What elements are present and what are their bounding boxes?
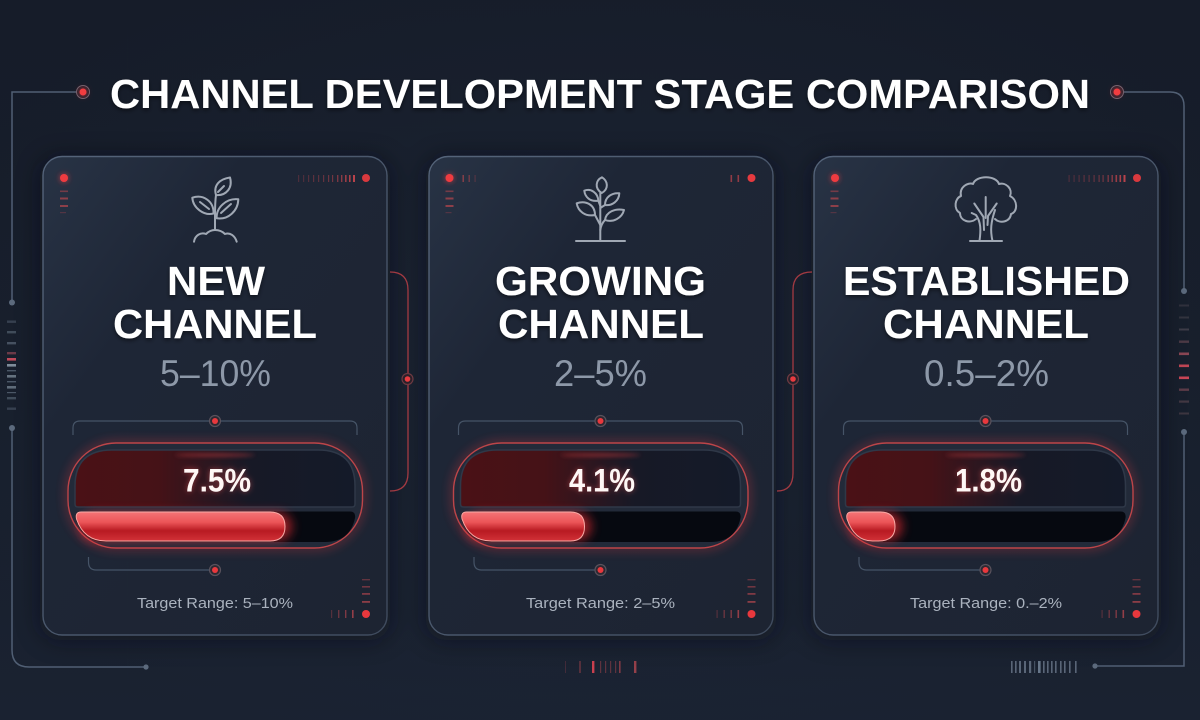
card shadows [40, 158, 1161, 640]
top bracket [844, 416, 1128, 435]
panel: established channel [814, 156, 1158, 635]
card body [429, 156, 773, 635]
title: CHANNEL DEVELOPMENT STAGE COMPARISON [110, 71, 1090, 117]
bottom bracket [859, 557, 991, 576]
heading: NEW [167, 258, 265, 304]
progress gauge [454, 443, 748, 548]
icon: tree [956, 177, 1016, 241]
top left status marker [830, 174, 839, 213]
bottom right status marker [331, 579, 370, 618]
bottom centre tick strip [565, 661, 636, 673]
fill [76, 512, 285, 541]
track [75, 512, 355, 542]
top left status marker [60, 174, 68, 213]
heading: CHANNEL [883, 301, 1089, 347]
panel: growing channel [429, 156, 773, 635]
heading [843, 258, 1130, 347]
connector: new to growing [390, 272, 413, 491]
icon: young plant [576, 177, 625, 241]
range value: 0.5–2% [924, 353, 1049, 394]
track [461, 512, 741, 542]
value: 7.5% [183, 462, 251, 498]
bottom right barcode strip [1011, 661, 1077, 673]
target range: Target Range: 2–5% [526, 595, 675, 612]
right tick scale [1179, 304, 1189, 414]
progress gauge [68, 443, 362, 548]
card body [814, 156, 1158, 635]
connector: growing to established [777, 272, 812, 491]
heading [113, 258, 317, 347]
fill glow [80, 512, 292, 541]
left frame line bottom with nodes [9, 425, 149, 670]
card body [43, 156, 387, 635]
right frame line bottom with nodes [1092, 429, 1187, 669]
value: 4.1% [569, 462, 635, 498]
panel: new channel [43, 156, 387, 635]
value: 1.8% [955, 462, 1022, 498]
value panel [75, 450, 355, 507]
fill [462, 512, 584, 541]
range value: 2–5% [554, 353, 647, 394]
top left status marker [446, 174, 476, 213]
progress gauge [838, 443, 1133, 548]
left tick scale [7, 320, 16, 410]
top right status marker [298, 174, 370, 182]
top right status marker [1068, 174, 1141, 182]
value panel [846, 450, 1126, 507]
bottom right status marker [1102, 579, 1140, 618]
top bracket [458, 416, 742, 435]
range value: 5–10% [160, 353, 271, 394]
fill glow [850, 512, 902, 541]
bottom bracket [474, 557, 606, 576]
heading: ESTABLISHED [843, 258, 1130, 304]
heading: CHANNEL [498, 301, 704, 347]
top bracket [73, 416, 357, 435]
track [846, 512, 1126, 542]
icon: sprout [192, 178, 238, 242]
top right status marker [730, 174, 756, 182]
bottom right status marker [716, 579, 756, 618]
left frame line top with node [9, 86, 90, 306]
right frame line top with node [1110, 86, 1187, 294]
fill glow [466, 512, 592, 541]
target range: Target Range: 5–10% [137, 595, 293, 612]
target range: Target Range: 0.–2% [910, 595, 1062, 612]
bottom bracket [88, 557, 220, 576]
heading: GROWING [495, 258, 706, 304]
fill [847, 512, 895, 541]
heading: CHANNEL [113, 301, 317, 347]
value panel [460, 450, 740, 507]
heading [495, 258, 706, 347]
